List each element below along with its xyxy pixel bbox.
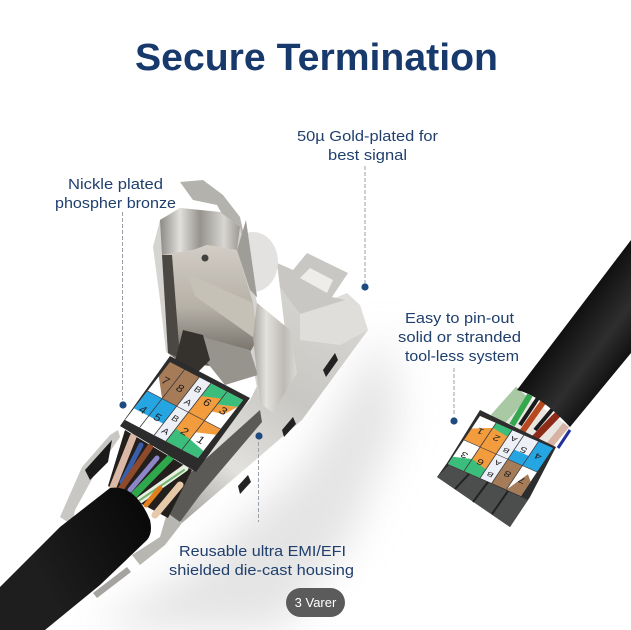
terminal block left <box>120 356 250 472</box>
terminal block left: 5 <box>151 411 165 424</box>
callout: nickle plated: Nickle plated <box>68 177 163 193</box>
callout: reusable housing <box>169 432 354 579</box>
connector block right: B <box>500 446 511 455</box>
terminal block left: 6 <box>200 396 214 409</box>
wires left <box>108 430 192 518</box>
callout: reusable housing: shielded die-cast housing <box>169 563 354 579</box>
callout: easy to pin-out: solid or stranded <box>398 330 521 346</box>
callout: easy to pin-out: Easy to pin-out <box>405 311 514 327</box>
cable left <box>0 488 151 630</box>
terminal block left: A <box>182 397 194 408</box>
connector block right: A <box>492 458 503 468</box>
callout: gold-plated <box>297 129 438 291</box>
button: 3 Varer: 3 Varer <box>295 595 337 610</box>
connector block right <box>437 410 556 527</box>
terminal block left: 2 <box>178 425 191 438</box>
connector block right: 7 <box>517 474 528 485</box>
callout: easy to pin-out <box>398 311 521 425</box>
wires right <box>490 390 570 448</box>
terminal block left: A <box>160 426 172 437</box>
connector block right: B <box>484 470 495 479</box>
connector block right: 8 <box>502 468 513 478</box>
shadow under connector <box>90 330 400 630</box>
connector block right: 1 <box>475 425 486 435</box>
lid <box>153 180 297 413</box>
callout: easy to pin-out: tool-less system <box>405 349 519 365</box>
connector block right: 6 <box>475 456 486 467</box>
terminal block left: B <box>192 384 204 395</box>
callout: nickle plated: phospher bronze <box>55 196 176 212</box>
button: 3 Varer <box>286 588 345 617</box>
connector block right: 3 <box>459 449 470 459</box>
black cable right <box>517 240 631 427</box>
terminal block left: 4 <box>136 404 150 417</box>
terminal block left: B <box>169 413 181 424</box>
callout: gold-plated: 50µ Gold-plated for <box>297 129 438 145</box>
terminal block left: 3 <box>216 405 230 418</box>
callout: nickle plated <box>55 177 176 409</box>
dark housing side <box>166 410 262 522</box>
connector assembly <box>0 180 368 630</box>
connector block right: 4 <box>533 450 544 461</box>
callout: reusable housing: Reusable ultra EMI/EFI <box>179 544 346 560</box>
callout: gold-plated: best signal <box>328 148 407 164</box>
cable and block right <box>437 240 631 527</box>
connector block right: 5 <box>518 444 529 454</box>
connector block right: A <box>508 434 519 444</box>
terminal block left: 1 <box>194 434 207 447</box>
terminal block left: 7 <box>159 375 172 388</box>
title: Secure Termination <box>135 37 498 79</box>
connector block right: 2 <box>491 432 502 443</box>
terminal block left: 8 <box>173 382 187 395</box>
metal body <box>60 253 368 598</box>
